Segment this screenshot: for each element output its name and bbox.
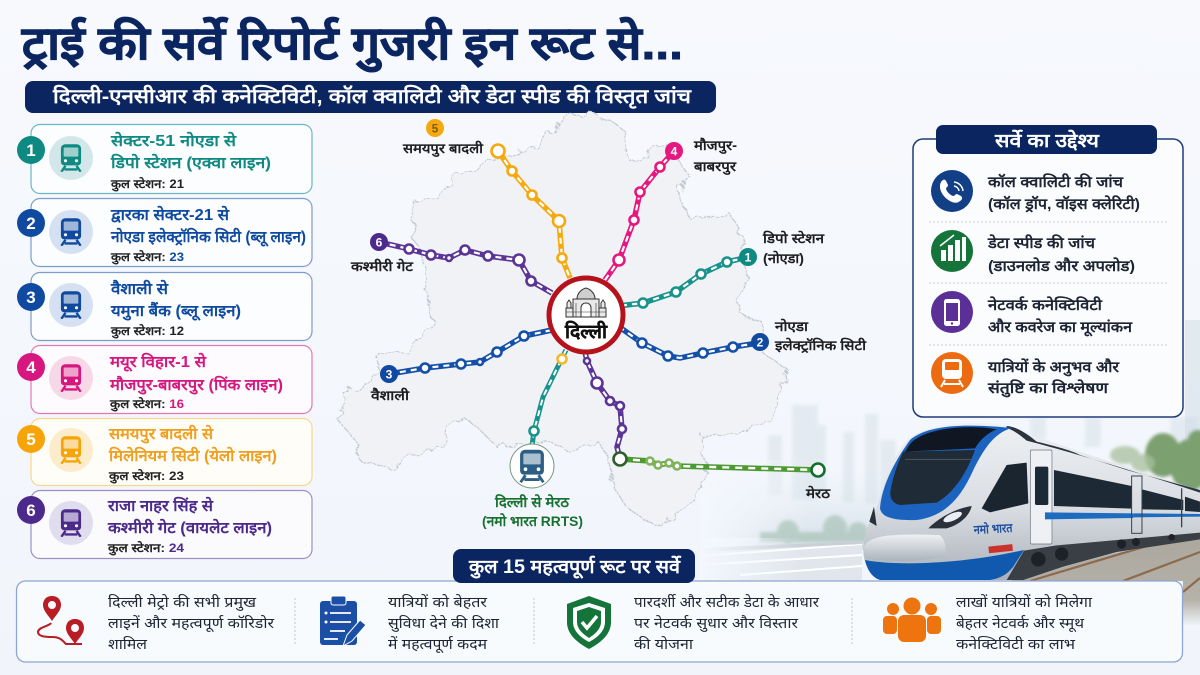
- panel: route card 1: 1: [26, 141, 36, 160]
- text: all major metro lines: दिल्ली मेट्रो की सभी प्रमुख: [108, 594, 257, 611]
- text: transparent data: पारदर्शी और सटीक डेटा के आधार: [634, 594, 820, 611]
- route line: Namo Bharat RRTS (teal): [530, 350, 566, 446]
- text: better facilities: यात्रियों को बेहतर: [388, 594, 488, 611]
- text: better facilities: [388, 594, 499, 653]
- text: data speed: [987, 234, 1135, 275]
- panel: route card 2: [17, 198, 312, 266]
- icon: data speed: [931, 230, 973, 272]
- icon: RRTS train in circle: [510, 444, 554, 488]
- panel: route card 3: 3: [26, 288, 36, 307]
- panel: route card 5: समयपुर बादली से: [108, 424, 214, 444]
- text: millions of passengers: कनेक्टिविटी का लाभ: [956, 636, 1076, 653]
- panel: bottom highlights: [16, 581, 1182, 662]
- icon: phone: [931, 170, 973, 212]
- banner: total 15 important routes: कुल 15 महत्वपूर्ण रूट पर सर्वे: [468, 555, 682, 579]
- map: Delhi-NCR outline: [338, 113, 788, 527]
- panel: route card 6: कुल स्टेशन: 24: [107, 541, 184, 556]
- hub: Delhi: [549, 278, 623, 352]
- panel: route card 6: कश्मीरी गेट (वायलेट लाइन): [107, 518, 272, 537]
- label: Delhi to Meerut RRTS: दिल्ली से मेरठ: [494, 494, 570, 510]
- panel: route card 2: द्वारका सेक्टर-21 से: [110, 205, 230, 224]
- text: millions of passengers: लाखों यात्रियों को मिलेगा: [956, 594, 1092, 611]
- panel: route card 4: मौजपुर-बाबरपुर (पिंक लाइन): [109, 375, 283, 395]
- route line 4: Maujpur-Babarpur (pink): [605, 151, 674, 280]
- route line 2: Noida Electronic City (blue): [618, 326, 758, 360]
- panel: route card 1: डिपो स्टेशन (एक्वा लाइन): [110, 153, 271, 172]
- panel: route card 4: मयूर विहार-1 से: [109, 352, 207, 372]
- text: network connectivity: और कवरेज का मूल्यांकन: [988, 318, 1133, 337]
- text: passenger experience: [987, 358, 1120, 398]
- label: Noida Electronic City: [774, 318, 867, 354]
- badge: line 4: [665, 142, 683, 160]
- badge: line 1: [739, 248, 757, 266]
- route line: violet branch south: [584, 352, 626, 459]
- label: Maujpur-Babarpur: बाबरपुर: [693, 159, 737, 175]
- label: Kashmere Gate: कश्मीरी गेट: [350, 258, 414, 274]
- text: network connectivity: [987, 296, 1133, 337]
- text: all major metro lines: [108, 594, 275, 653]
- panel: route card 6: राजा नाहर सिंह से: [107, 496, 214, 515]
- text: call quality: कॉल क्वालिटी की जांच: [987, 173, 1125, 191]
- heading: survey objectives: सर्वे का उद्देश्य: [994, 129, 1100, 152]
- heading: survey objectives: [936, 125, 1157, 154]
- label: Delhi to Meerut RRTS: [482, 494, 583, 529]
- label: Noida Electronic City: नोएडा: [774, 318, 809, 334]
- panel: route card 4: 4: [26, 358, 36, 377]
- text: data speed: डेटा स्पीड की जांच: [987, 234, 1097, 252]
- panel: route card 4: कुल स्टेशन: 16: [109, 397, 184, 412]
- icon: passenger train: [931, 352, 973, 394]
- subtitle banner: दिल्ली-एनसीआर की कनेक्टिविटी, कॉल क्वालिटी और डेटा स्पीड की विस्तृत जांच: [52, 84, 692, 109]
- title: ट्राई की सर्वे रिपोर्ट गुजरी इन रूट से...: [21, 17, 683, 73]
- text: passenger experience: यात्रियों के अनुभव और: [987, 358, 1120, 377]
- panel: route card 5: [17, 418, 312, 486]
- text: network connectivity: नेटवर्क कनेक्टिविटी: [987, 296, 1103, 314]
- badge: line 2: [751, 333, 769, 351]
- background: viaduct road and rails: [700, 525, 1200, 625]
- panel: route card 6: [17, 490, 312, 558]
- text: all major metro lines: शामिल: [108, 636, 148, 653]
- panel: route card 2: कुल स्टेशन: 23: [110, 250, 184, 265]
- panel: route card 2: 2: [26, 214, 36, 233]
- icon: people group: [883, 598, 941, 642]
- background: trees behind the train: [760, 430, 1200, 544]
- badge: line 4: 4: [671, 144, 678, 158]
- badge: line 3: [380, 365, 398, 383]
- route line 3: Vaishali (blue): [389, 330, 552, 374]
- badge: line 5: [426, 119, 444, 137]
- label: Noida Electronic City: इलेक्ट्रॉनिक सिटी: [774, 337, 867, 354]
- badge: line 1: 1: [745, 250, 752, 264]
- label: Vaishali: वैशाली: [370, 387, 410, 403]
- icon: shield check: [567, 596, 611, 649]
- label: Samaypur Badli: समयपुर बादली: [402, 140, 484, 157]
- route line 6: Kashmere Gate (violet): [379, 242, 552, 293]
- label: Delhi to Meerut RRTS: (नमो भारत RRTS): [482, 513, 583, 529]
- badge: line 6: [370, 233, 388, 251]
- text: better facilities: में महत्वपूर्ण कदम: [388, 636, 487, 653]
- text: transparent data: [634, 594, 820, 653]
- badge: line 6: 6: [376, 236, 383, 250]
- panel: route card 1: [17, 124, 312, 194]
- panel: route card 2: नोएडा इलेक्ट्रॉनिक सिटी (ब्लू लाइन): [110, 227, 306, 247]
- route line 1: Depot Station (teal): [618, 257, 748, 308]
- route line 5: Samaypur Badli (yellow): [492, 144, 570, 278]
- label: Maujpur-Babarpur: [693, 137, 737, 175]
- label: Maujpur-Babarpur: मौजपुर-: [693, 137, 737, 154]
- text: call quality: (कॉल ड्रॉप, वॉइस क्लेरिटी): [988, 195, 1140, 213]
- panel: route card 3: कुल स्टेशन: 12: [110, 324, 184, 339]
- panel: survey objectives: [913, 125, 1183, 417]
- text: Namo Bharat on train: नमो भारत: [972, 520, 1014, 537]
- panel: route card 3: यमुना बैंक (ब्लू लाइन): [110, 301, 241, 321]
- hub: Delhi: दिल्ली: [564, 320, 608, 343]
- text: data speed: (डाउनलोड और अपलोड): [988, 257, 1135, 275]
- icon: smartphone: [931, 291, 973, 333]
- label: Depot Station: (नोएडा): [763, 250, 804, 266]
- background: hazy city skyline: [700, 320, 1200, 550]
- panel: route card 3: वैशाली से: [110, 279, 169, 298]
- text: better facilities: सुविधा देने की दिशा: [388, 615, 499, 632]
- subtitle banner: [25, 81, 716, 113]
- panel: route card 1: सेक्टर-51 नोएडा से: [110, 131, 237, 150]
- panel: route card 5: कुल स्टेशन: 23: [108, 469, 184, 484]
- badge: line 3: 3: [386, 368, 393, 382]
- text: passenger experience: संतुष्टि का विश्लेषण: [987, 379, 1109, 398]
- icon: clipboard and pen: [320, 596, 366, 646]
- panel: route card 5: मिलेनियम सिटी (येलो लाइन): [108, 446, 277, 465]
- badge: line 5: 5: [432, 124, 439, 136]
- panel: route card 6: 6: [26, 501, 36, 520]
- panel: route card 3: [17, 272, 312, 340]
- label: Depot Station: [762, 230, 825, 266]
- panel: route card 5: 5: [26, 430, 36, 449]
- badge: line 2: 2: [757, 336, 764, 350]
- icon: route pins: [38, 596, 84, 644]
- label: Depot Station: डिपो स्टेशन: [762, 230, 825, 246]
- text: millions of passengers: बेहतर नेटवर्क और स्मूथ: [956, 615, 1085, 632]
- train: Namo Bharat: [863, 423, 1200, 580]
- banner: total 15 important routes: [453, 549, 695, 583]
- text: transparent data: की योजना: [634, 636, 693, 653]
- text: transparent data: पर नेटवर्क सुधार और विस्तार: [634, 615, 799, 632]
- text: all major metro lines: लाइनें और महत्वपूर्ण कॉरिडोर: [108, 615, 275, 632]
- text: millions of passengers: [956, 594, 1092, 653]
- label: Meerut: मेरठ: [805, 485, 831, 501]
- panel: route card 1: कुल स्टेशन: 21: [110, 177, 184, 192]
- panel: route card 4: [17, 346, 312, 414]
- text: call quality: [987, 173, 1140, 213]
- route line: Meerut (green): [614, 452, 824, 476]
- icon: Delhi monument: [566, 288, 606, 317]
